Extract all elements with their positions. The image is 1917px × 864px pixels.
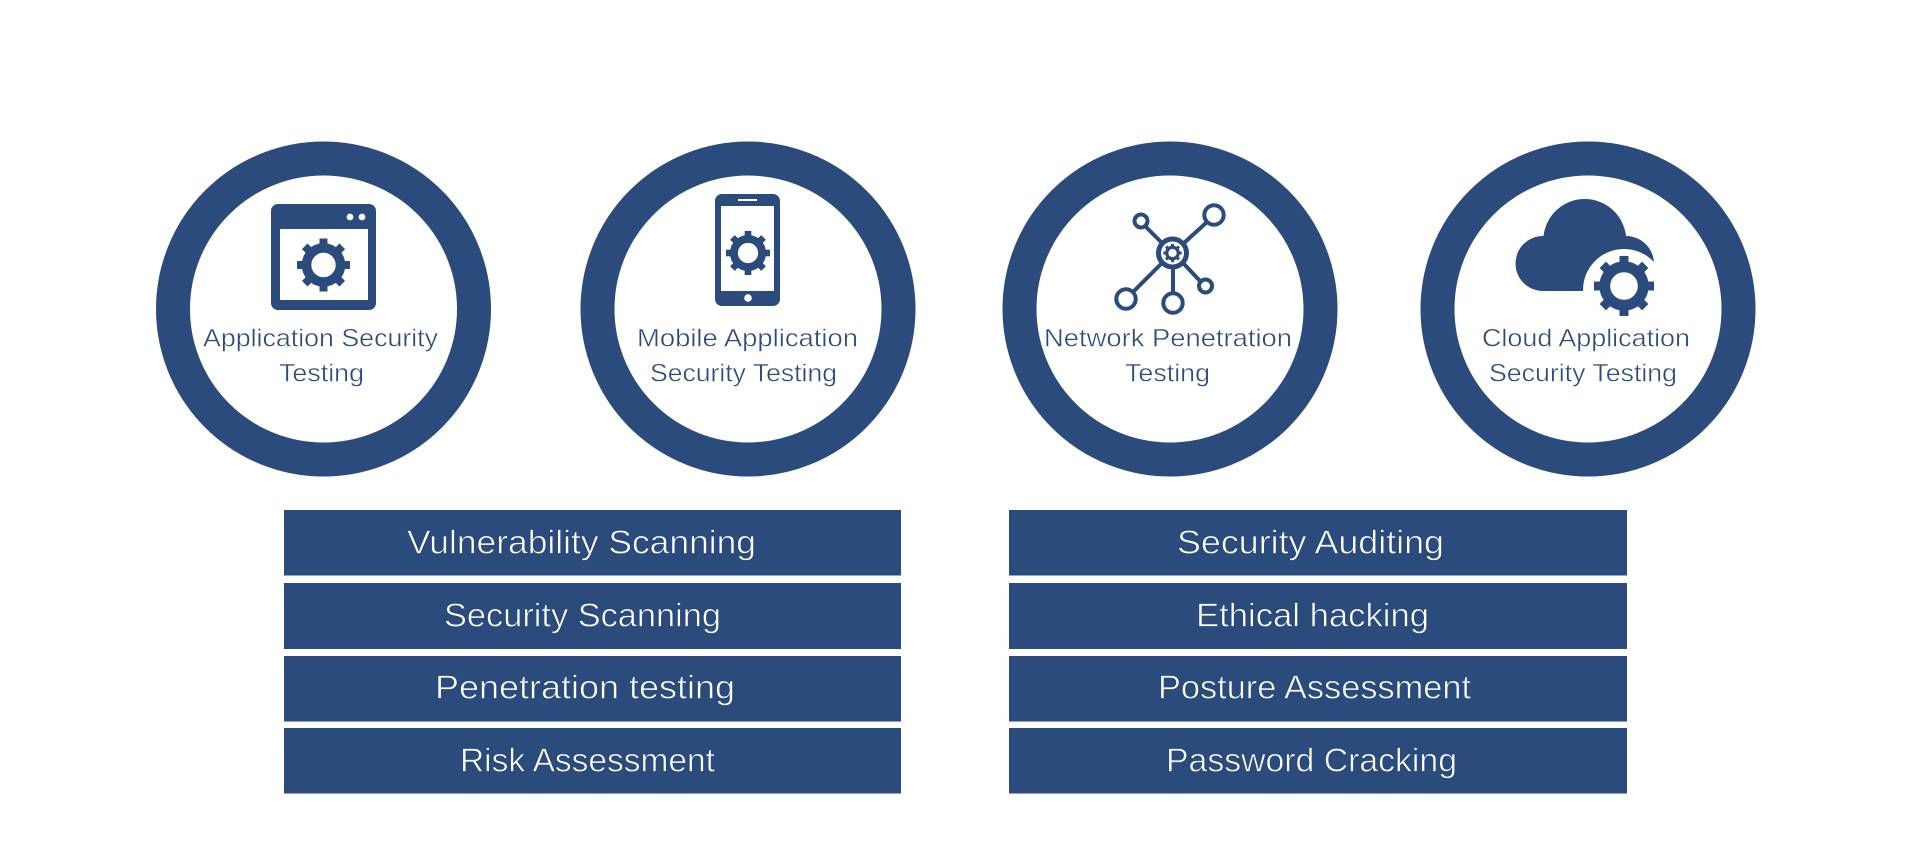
panel: Mobile Application Security Testing	[598, 158, 898, 460]
label	[1044, 324, 1292, 388]
icon: cloud with gear	[1516, 199, 1665, 331]
panel: right activity list	[1009, 510, 1627, 794]
bar: Password Cracking	[1009, 728, 1627, 794]
label: Testing	[1125, 360, 1210, 388]
icon: application window with gear	[271, 204, 376, 310]
ring	[173, 158, 474, 460]
bar: Ethical hacking: Ethical hacking	[1196, 596, 1429, 634]
label	[203, 324, 439, 388]
bar: Risk Assessment: Risk Assessment	[460, 742, 715, 778]
bar: Security Scanning: Security Scanning	[444, 596, 721, 634]
ring	[1438, 158, 1738, 460]
bar: Risk Assessment	[284, 728, 901, 794]
label: Testing	[279, 360, 364, 388]
bar: Penetration testing: Penetration testing	[435, 668, 735, 706]
bar: Security Scanning	[284, 583, 901, 649]
ring	[1020, 158, 1320, 460]
label	[637, 324, 858, 388]
label: Application Security	[203, 324, 439, 352]
bar: Vulnerability Scanning	[284, 510, 901, 576]
label: Network Penetration	[1044, 324, 1292, 352]
bar: Posture Assessment	[1009, 656, 1627, 722]
bar: Password Cracking: Password Cracking	[1166, 742, 1457, 778]
bar: Vulnerability Scanning: Vulnerability Scanning	[407, 524, 756, 560]
bar: Security Auditing: Security Auditing	[1177, 524, 1444, 560]
label: Security Testing	[1489, 360, 1677, 388]
panel: Cloud Application Security Testing	[1438, 158, 1738, 460]
bar: Security Auditing	[1009, 510, 1627, 576]
label: Security Testing	[650, 360, 837, 388]
bar: Ethical hacking	[1009, 583, 1627, 649]
panel: Application Security Testing	[173, 158, 474, 460]
label	[1482, 324, 1690, 388]
label: Cloud Application	[1482, 324, 1690, 352]
panel: Network Penetration Testing	[1020, 158, 1320, 460]
icon: phone with gear	[715, 194, 780, 306]
icon: network nodes with gear	[1116, 205, 1224, 313]
panel: left activity list	[284, 510, 901, 794]
ring	[598, 158, 898, 460]
bar: Posture Assessment: Posture Assessment	[1158, 668, 1471, 706]
label: Mobile Application	[637, 324, 858, 352]
bar: Penetration testing	[284, 656, 901, 722]
